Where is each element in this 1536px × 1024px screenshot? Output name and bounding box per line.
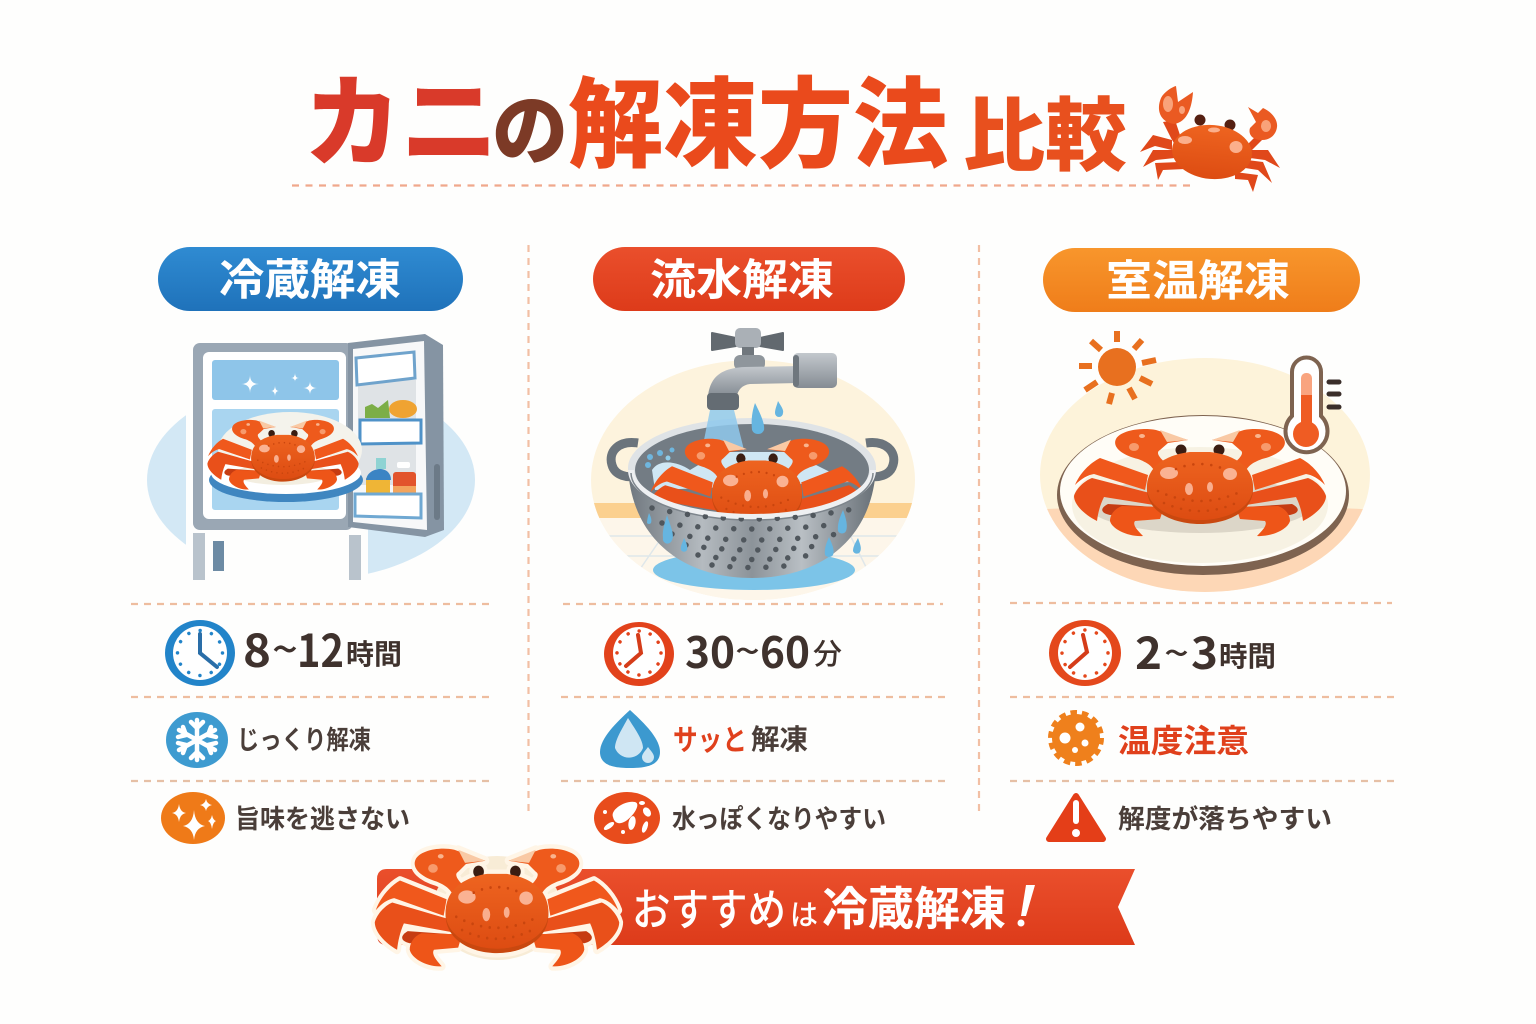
title underline <box>292 184 1192 187</box>
icon: blue clock <box>165 620 235 686</box>
time: 8~12 hours <box>165 615 402 686</box>
time: 30~60 minutes: 分 <box>813 631 842 673</box>
time: 2~3 hours <box>1049 618 1276 686</box>
feature: watch the temperature: 温度注意 <box>1118 723 1249 759</box>
icon: thermometer <box>1286 358 1339 452</box>
time: 2~3 hours: 時間 <box>1219 635 1276 675</box>
colander handles <box>611 443 894 477</box>
title: 解凍方法 <box>568 70 948 180</box>
colander bowl <box>628 468 876 578</box>
icon: red clock <box>1049 620 1121 686</box>
banner text <box>632 883 1035 935</box>
time: 30~60 minutes: 60 <box>760 619 810 681</box>
feature: keeps umami: 旨味を逃さない <box>235 804 410 834</box>
heading: refrigerator thawing: 冷蔵解凍 <box>219 257 401 305</box>
icon: warning triangle <box>1049 796 1103 839</box>
time: 8~12 hours: 12 <box>297 615 344 680</box>
banner: recommendation <box>375 849 1135 966</box>
time: 8~12 hours: 時間 <box>346 633 402 673</box>
feature: watch the temperature <box>1050 712 1249 764</box>
heading: room temperature thawing <box>1043 248 1360 312</box>
feature: tends to get watery <box>594 792 886 844</box>
heading: running water thawing <box>593 247 905 311</box>
title: 比較 <box>963 92 1127 181</box>
icon: snowflake <box>166 712 228 768</box>
feature: quick thawing: 解凍 <box>751 724 808 755</box>
feature: freshness drops easily <box>1049 796 1332 839</box>
time: 8~12 hours: ~ <box>272 618 298 676</box>
banner text: は <box>790 900 818 932</box>
water drops <box>647 401 861 557</box>
panel: refrigerator thawing <box>147 247 475 844</box>
heading: refrigerator thawing <box>158 247 463 311</box>
feature: freshness drops easily: 解度が落ちやすい <box>1118 804 1332 834</box>
time: 2~3 hours: 3 <box>1191 618 1218 682</box>
feature: quick thawing <box>600 710 808 768</box>
time: 8~12 hours: 8 <box>243 615 271 680</box>
icon: water blob <box>594 792 660 844</box>
illustration: crab on plate <box>1030 331 1380 600</box>
illustration: open fridge with crab <box>147 334 475 582</box>
banner text: おすすめ <box>632 886 786 935</box>
icon: title crab <box>1140 86 1280 192</box>
feature: slow thawing: じっくり解凍 <box>237 725 371 755</box>
ribbon <box>377 869 1135 945</box>
banner text: 冷蔵解凍 <box>822 883 1006 935</box>
time: 30~60 minutes: ~ <box>735 623 760 675</box>
time: 2~3 hours: 2 <box>1135 618 1162 682</box>
icon: water drop <box>600 710 660 768</box>
icon: banner crab <box>375 849 619 966</box>
time: 30~60 minutes <box>604 619 842 686</box>
feature: slow thawing <box>166 712 371 768</box>
icon: red clock <box>604 622 674 686</box>
icon: spiky bacteria <box>1050 712 1102 764</box>
feature: tends to get watery: 水っぽくなりやすい <box>672 804 886 834</box>
heading: room temperature thawing: 室温解凍 <box>1106 258 1290 306</box>
time: 30~60 minutes: 30 <box>685 619 735 681</box>
illustration: crab in colander under faucet <box>580 328 920 610</box>
title: の <box>492 87 568 175</box>
panel: running water thawing <box>580 247 920 844</box>
icon: sun <box>1079 331 1156 404</box>
feature: keeps umami <box>161 792 410 844</box>
heading: running water thawing: 流水解凍 <box>650 257 834 305</box>
feature: quick thawing: サッと <box>673 725 747 757</box>
faucet <box>707 328 837 410</box>
column dividers <box>131 245 1394 812</box>
water stream <box>702 410 744 450</box>
time: 2~3 hours: ~ <box>1164 625 1189 677</box>
title <box>304 68 1127 181</box>
panel: room temperature thawing <box>1030 248 1380 839</box>
title: カニ <box>304 68 498 180</box>
icon: sparkles <box>161 792 225 844</box>
